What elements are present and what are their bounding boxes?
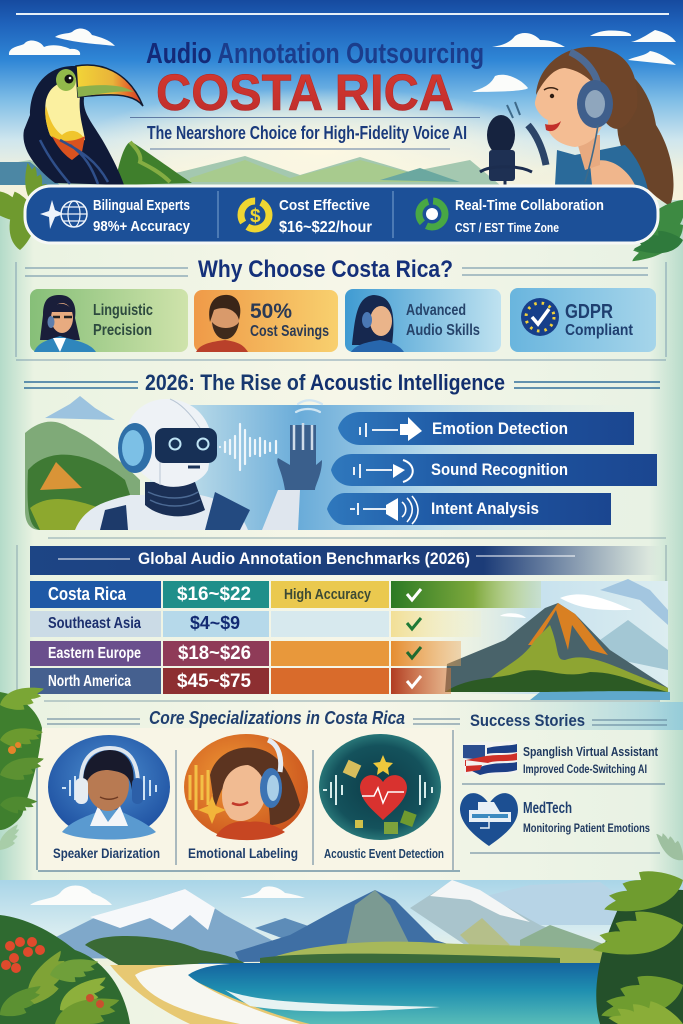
bilingual experts: [93, 198, 191, 235]
panel: rise of acoustic intelligence: [24, 370, 660, 530]
tropical foliage: right: [588, 826, 683, 1024]
foliage: left side: [0, 683, 48, 854]
sea: [185, 963, 640, 1024]
title line 1: Audio Annotation Outsourcing: [146, 38, 484, 70]
acoustic event detection: [319, 734, 444, 861]
bar: emotion detection: Emotion Detection: [432, 419, 568, 438]
row: costa rica: $16~$22: [177, 584, 251, 605]
emotional labeling: [184, 734, 308, 861]
toucan illustration: [23, 65, 192, 185]
cost effective: [279, 197, 372, 236]
title line 2: COSTA RICA: [156, 64, 454, 121]
header mountains: [0, 156, 500, 185]
icon: sparkle globe: [40, 200, 87, 229]
row: eastern europe: [30, 641, 461, 666]
card: gdpr compliant: GDPR: [565, 301, 613, 323]
banner: key facts: [25, 186, 658, 243]
panel: benchmarks table: [17, 538, 670, 701]
card: advanced audio skills: Audio Skills: [406, 322, 480, 339]
woman with microphone illustration: [480, 47, 674, 206]
top rule: [16, 13, 669, 15]
tropical foliage: left: [0, 915, 130, 1024]
speaker diarization: [48, 735, 170, 861]
card: linguistic precision: [30, 289, 188, 352]
card: gdpr compliant: Compliant: [565, 322, 634, 339]
header bar: Global Audio Annotation Benchmarks (2026): [138, 550, 470, 568]
bar: intent analysis: Intent Analysis: [431, 499, 539, 518]
real-time collaboration: Real-Time Collaboration: [455, 197, 604, 214]
story: medtech: Monitoring Patient Emotions: [523, 821, 650, 835]
story: spanglish virtual assistant: [523, 744, 659, 776]
beach: [110, 965, 640, 1024]
bar: intent analysis: [327, 493, 611, 525]
sound waveform: [220, 400, 322, 470]
row: eastern europe: $18~$26: [178, 643, 251, 664]
story: spanglish virtual assistant: Improved Code-Switching AI: [523, 762, 647, 776]
icon: medtech heart: [460, 793, 518, 846]
clouds: header sky: [9, 28, 676, 92]
bar: sound recognition: [331, 454, 657, 486]
card: cost savings: [194, 290, 338, 352]
card: cost savings: Cost Savings: [250, 323, 329, 340]
landscape illustration: [25, 396, 142, 530]
surf: [135, 964, 300, 1024]
card: gdpr compliant: [510, 288, 656, 352]
volcano illustration: [440, 579, 670, 700]
card: linguistic precision: Precision: [93, 322, 152, 339]
icon: eu check badge: [521, 298, 559, 336]
row: north america: [30, 668, 451, 694]
scene background: [150, 405, 650, 530]
card: advanced audio skills: [345, 289, 501, 352]
icon: collaboration ring: [419, 201, 445, 227]
panel: core specializations: [37, 708, 460, 871]
card: cost savings: 50%: [250, 300, 292, 323]
leaves: upper left and upper right: [0, 160, 683, 268]
cost effective: Cost Effective: [279, 197, 370, 214]
row: eastern europe: Eastern Europe: [48, 645, 141, 662]
clouds: [30, 885, 595, 905]
subtitle: The Nearshore Choice for High-Fidelity Voice AI: [147, 123, 467, 143]
heading: Why Choose Costa Rica?: [198, 256, 453, 283]
mountains: [470, 882, 625, 925]
story: medtech: MedTech: [523, 800, 572, 817]
acoustic event detection: Acoustic Event Detection: [324, 846, 444, 861]
robot illustration: [75, 399, 322, 530]
real-time collaboration: CST / EST Time Zone: [455, 220, 559, 235]
card: advanced audio skills: Advanced: [406, 302, 466, 319]
bar: sound recognition: Sound Recognition: [431, 460, 568, 479]
header bar: [30, 546, 660, 575]
row: southeast asia: Southeast Asia: [48, 615, 141, 632]
row: costa rica: High Accuracy: [284, 586, 372, 603]
row: costa rica: [30, 581, 541, 608]
row: southeast asia: [30, 611, 481, 637]
bar: emotion detection: [338, 412, 634, 445]
row: southeast asia: $4~$9: [190, 613, 240, 633]
heading: Core Specializations in Costa Rica: [149, 708, 405, 728]
emotional labeling: Emotional Labeling: [188, 845, 298, 861]
heading: 2026: The Rise of Acoustic Intelligence: [145, 370, 505, 395]
cost effective: $16~$22/hour: [279, 219, 372, 236]
tree line: [260, 942, 640, 964]
heading: Success Stories: [470, 711, 585, 730]
bottom landscape: [0, 826, 683, 1024]
icon: dollar cycle: [241, 201, 269, 229]
panel: why choose costa rica: [16, 256, 666, 360]
panel: success stories: [453, 711, 667, 870]
bilingual experts: Bilingual Experts: [93, 198, 190, 214]
icon: us costa rica flag: [463, 740, 517, 776]
story: medtech: [523, 800, 650, 835]
bilingual experts: 98%+ Accuracy: [93, 218, 191, 235]
row: north america: $45~$75: [177, 671, 251, 692]
row: north america: North America: [48, 673, 131, 690]
icon: dollar cycle: $: [250, 206, 261, 227]
card: linguistic precision: Linguistic: [93, 302, 153, 319]
subtitle: [130, 118, 480, 149]
row: costa rica: Costa Rica: [48, 584, 127, 604]
speaker diarization: Speaker Diarization: [53, 845, 160, 861]
real-time collaboration: [455, 197, 604, 235]
